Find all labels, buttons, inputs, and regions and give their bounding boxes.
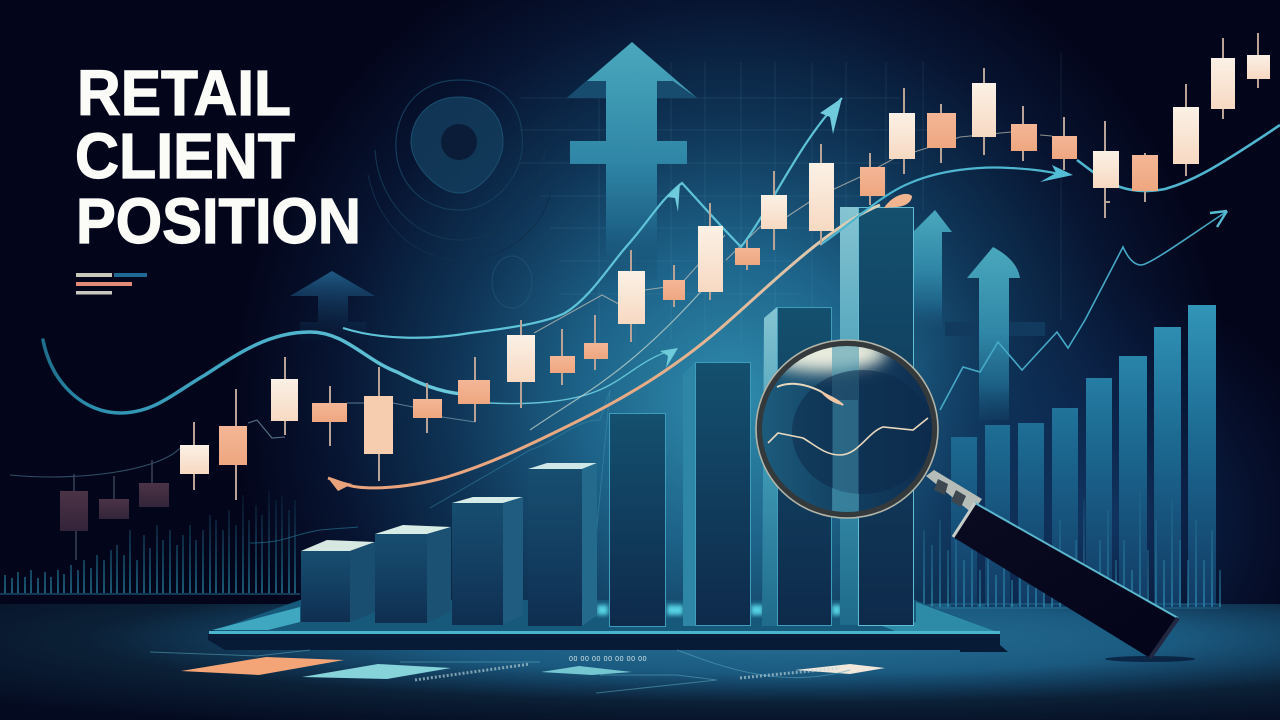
large background up arrow bbox=[567, 42, 697, 280]
background grid bbox=[520, 52, 1061, 340]
thin connecting lines through candles bbox=[10, 132, 1052, 477]
right zigzag line with arrow bbox=[940, 211, 1227, 410]
title: RETAIL bbox=[77, 57, 291, 129]
bar 7 bbox=[762, 307, 832, 626]
candlesticks: dim left bbox=[60, 460, 169, 560]
lens rim bbox=[759, 343, 935, 515]
magnifying glass bbox=[756, 332, 1178, 658]
bar 5 bbox=[610, 414, 666, 626]
thin blue continuation with arrow bbox=[490, 270, 720, 430]
candlesticks: rising middle bbox=[180, 144, 834, 500]
platform bbox=[208, 600, 1008, 652]
blue rising line with arrows bbox=[343, 98, 842, 338]
title bbox=[75, 57, 361, 257]
title: CLIENT bbox=[75, 120, 295, 192]
floor bbox=[0, 604, 1280, 720]
bar 8 bbox=[840, 207, 914, 626]
bar 4 bbox=[528, 463, 597, 626]
magnifier floor shadow bbox=[1105, 656, 1195, 662]
candlesticks: upper right bbox=[860, 33, 1270, 218]
lens bbox=[759, 343, 935, 515]
right background glow bbox=[860, 280, 1280, 610]
floor micro labels: 00 00 00 00 00 00 00 bbox=[569, 656, 647, 663]
blue upper curve with arrow bbox=[820, 125, 1280, 245]
rising thin background line bbox=[430, 390, 610, 600]
blue wave line bbox=[43, 332, 462, 413]
left spike chart bbox=[0, 490, 358, 594]
right bar chart bbox=[951, 305, 1216, 607]
floor decorations bbox=[150, 650, 885, 693]
background concentric circles bbox=[368, 80, 551, 308]
right spike chart bbox=[924, 490, 1220, 608]
bar 1 bbox=[301, 540, 375, 622]
title: POSITION bbox=[76, 185, 361, 257]
3D bar chart bbox=[301, 207, 914, 626]
lens curves bbox=[768, 384, 928, 455]
peach rising line bbox=[328, 194, 912, 491]
handle bbox=[926, 470, 1178, 658]
right background up arrows bbox=[913, 210, 1045, 420]
bar 2 bbox=[375, 525, 451, 623]
title accent bars bbox=[76, 273, 147, 294]
glowing bar bases bbox=[597, 605, 841, 615]
bar 6 bbox=[683, 362, 750, 626]
bar 3 bbox=[452, 497, 523, 625]
small left up arrow bbox=[290, 271, 375, 340]
